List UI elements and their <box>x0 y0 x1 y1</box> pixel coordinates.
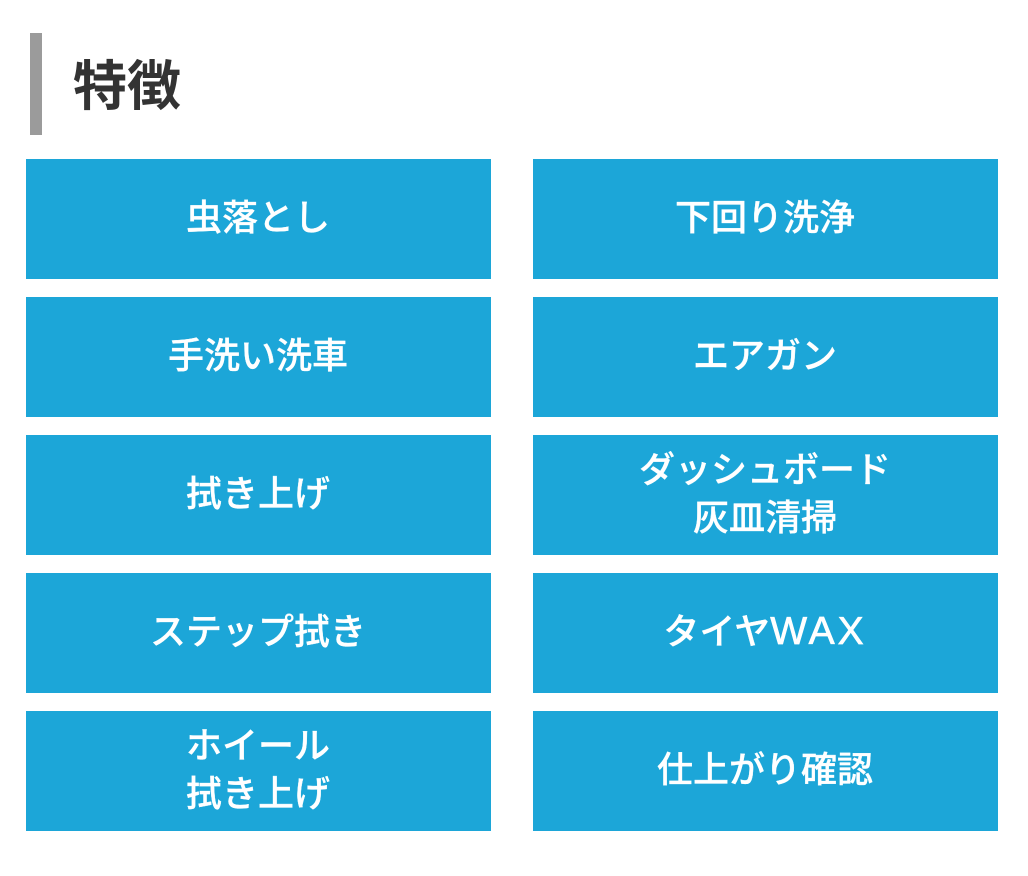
feature: step wipe: ステップ拭き <box>150 611 366 652</box>
feature: dashboard and ashtray cleaning: 灰皿清掃 <box>693 497 837 538</box>
feature: wheel wipe down: 拭き上げ <box>186 773 330 814</box>
feature: underbody wash: 下回り洗浄 <box>675 197 855 238</box>
feature: tire wax: タイヤWAX <box>663 610 867 653</box>
feature: bug removal <box>26 159 491 279</box>
feature: wipe down: 拭き上げ <box>186 473 330 514</box>
feature: wheel wipe down <box>26 711 491 831</box>
feature: wheel wipe down: ホイール <box>186 725 330 766</box>
feature: final check: 仕上がり確認 <box>657 749 873 790</box>
feature: underbody wash <box>533 159 998 279</box>
feature: dashboard and ashtray cleaning <box>533 435 998 555</box>
feature: wipe down <box>26 435 491 555</box>
feature: final check <box>533 711 998 831</box>
feature: tire wax <box>533 573 998 693</box>
feature: step wipe <box>26 573 491 693</box>
feature: hand wash: 手洗い洗車 <box>168 335 348 376</box>
title: 特徴 <box>73 57 181 117</box>
heading accent bar <box>30 33 42 135</box>
feature: air gun <box>533 297 998 417</box>
feature: air gun: エアガン <box>693 335 837 376</box>
feature: dashboard and ashtray cleaning: ダッシュボード <box>639 449 891 490</box>
feature: hand wash <box>26 297 491 417</box>
feature: bug removal: 虫落とし <box>186 197 330 238</box>
